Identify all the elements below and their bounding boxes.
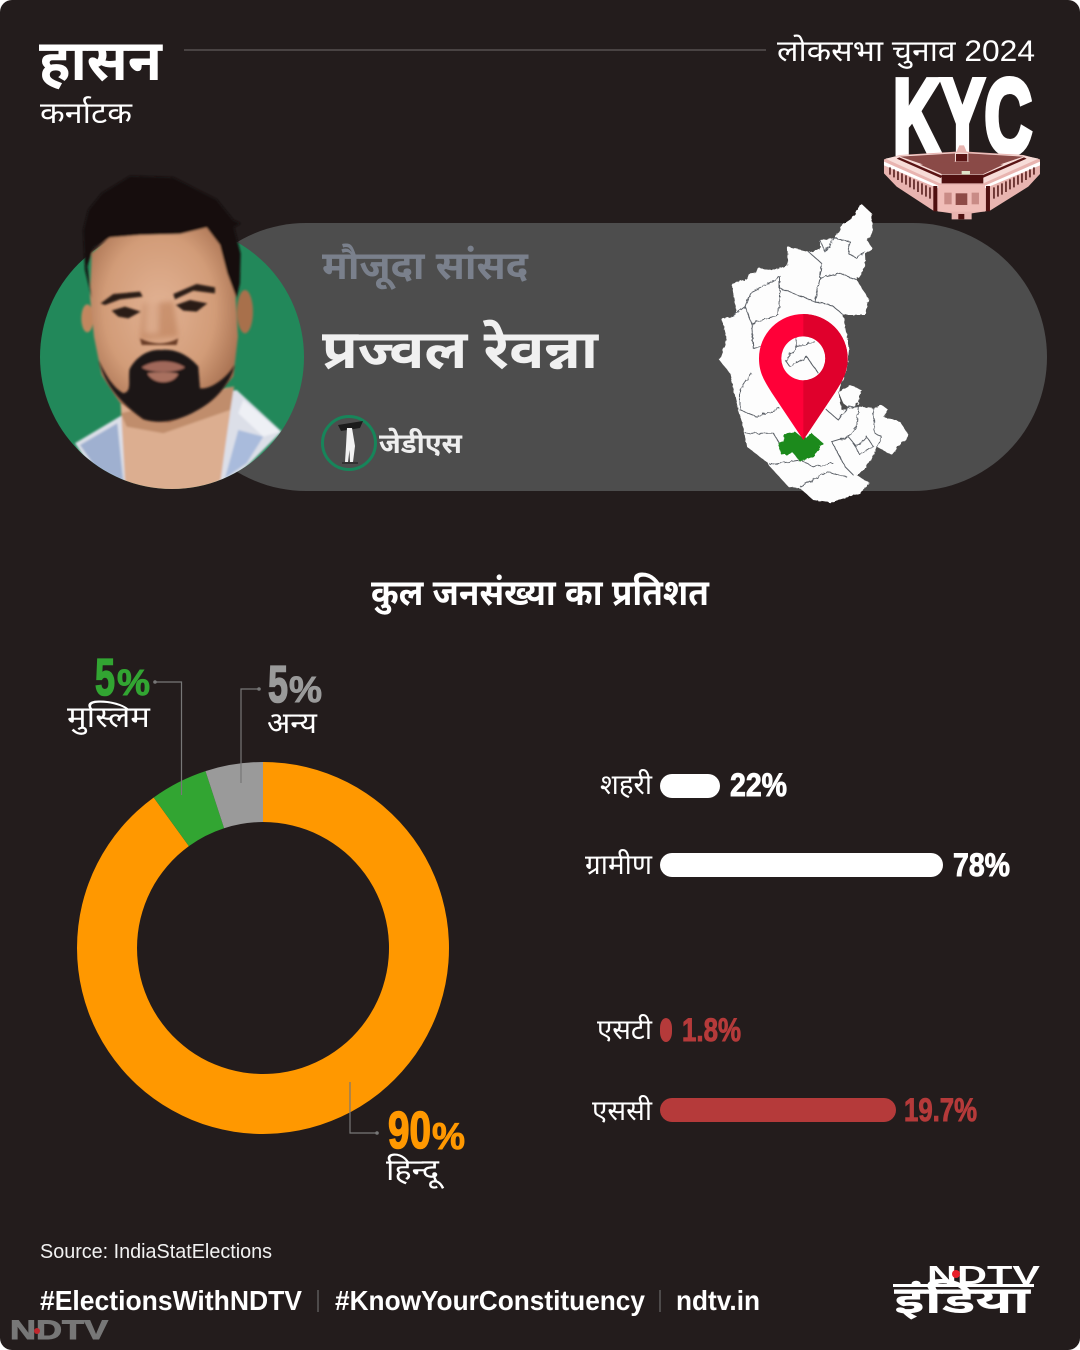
callout: others [241, 656, 322, 783]
callout: others: % [289, 669, 322, 710]
portrait: MP photo [40, 176, 304, 497]
bar: ST: 1.8% [682, 1012, 741, 1048]
heading: constituency: हासन [39, 29, 163, 93]
icon: party symbol [322, 416, 376, 470]
map: Karnataka [719, 204, 908, 503]
callout: muslim: 5 [95, 649, 115, 707]
bar: urban [600, 767, 787, 803]
logo: NDTV India: इंडिया [894, 1278, 1031, 1322]
icon: location pin [759, 314, 848, 440]
callout: muslim: मुस्लिम [67, 700, 151, 735]
logo: NDTV India [893, 1260, 1041, 1322]
source: Source: IndiaStatElections [40, 1241, 272, 1263]
label: current MP: मौजूदा सांसद [322, 244, 529, 290]
bar chart: urban rural [585, 767, 1010, 883]
logo: KYC [884, 58, 1040, 219]
bar: rural [585, 847, 1010, 883]
heading: election title: लोकसभा चुनाव 2024 [777, 34, 1035, 69]
name: MP: प्रज्वल रेवन्ना [322, 319, 599, 380]
logo: NDTV grey: NDTV [10, 1315, 108, 1345]
panel: current MP [172, 223, 1047, 491]
bar: ST: एसटी [597, 1013, 653, 1045]
bar: rural: 78% [953, 847, 1010, 883]
footer: hashtags: #ElectionsWithNDTV [40, 1285, 302, 1316]
callout: muslim [67, 649, 182, 795]
bar chart: ST SC [592, 1012, 977, 1128]
donut chart: religion [77, 762, 449, 1134]
callout: muslim: % [117, 662, 150, 703]
bar: SC [592, 1092, 977, 1128]
heading: population share: कुल जनसंख्या का प्रतिशत [371, 572, 710, 615]
callout: hindu: % [432, 1116, 465, 1157]
party: JDS: जेडीएस [379, 426, 463, 459]
party: JDS [322, 416, 463, 470]
callout: hindu: 90 [388, 1102, 431, 1160]
bar: SC: एससी [592, 1094, 653, 1126]
callout: hindu: हिन्दू [386, 1153, 444, 1189]
callout: others: अन्य [267, 707, 318, 740]
bar: ST [597, 1012, 741, 1048]
icon: parliament building [884, 145, 1040, 219]
footer: hashtags [40, 1285, 760, 1316]
heading: constituency: कर्नाटक [40, 96, 133, 130]
bar: urban: शहरी [600, 768, 653, 800]
logo: NDTV India: NDTV [927, 1260, 1041, 1290]
bar: SC: 19.7% [904, 1092, 977, 1128]
callout: others: 5 [268, 656, 288, 714]
bar: rural: ग्रामीण [585, 848, 653, 880]
footer: hashtags: #KnowYourConstituency [335, 1285, 645, 1316]
callout: hindu [350, 1082, 465, 1189]
heading: constituency [39, 29, 163, 130]
highlighted district: Hassan [778, 432, 823, 462]
footer: hashtags: ndtv.in [676, 1285, 760, 1316]
bar: urban: 22% [730, 767, 787, 803]
